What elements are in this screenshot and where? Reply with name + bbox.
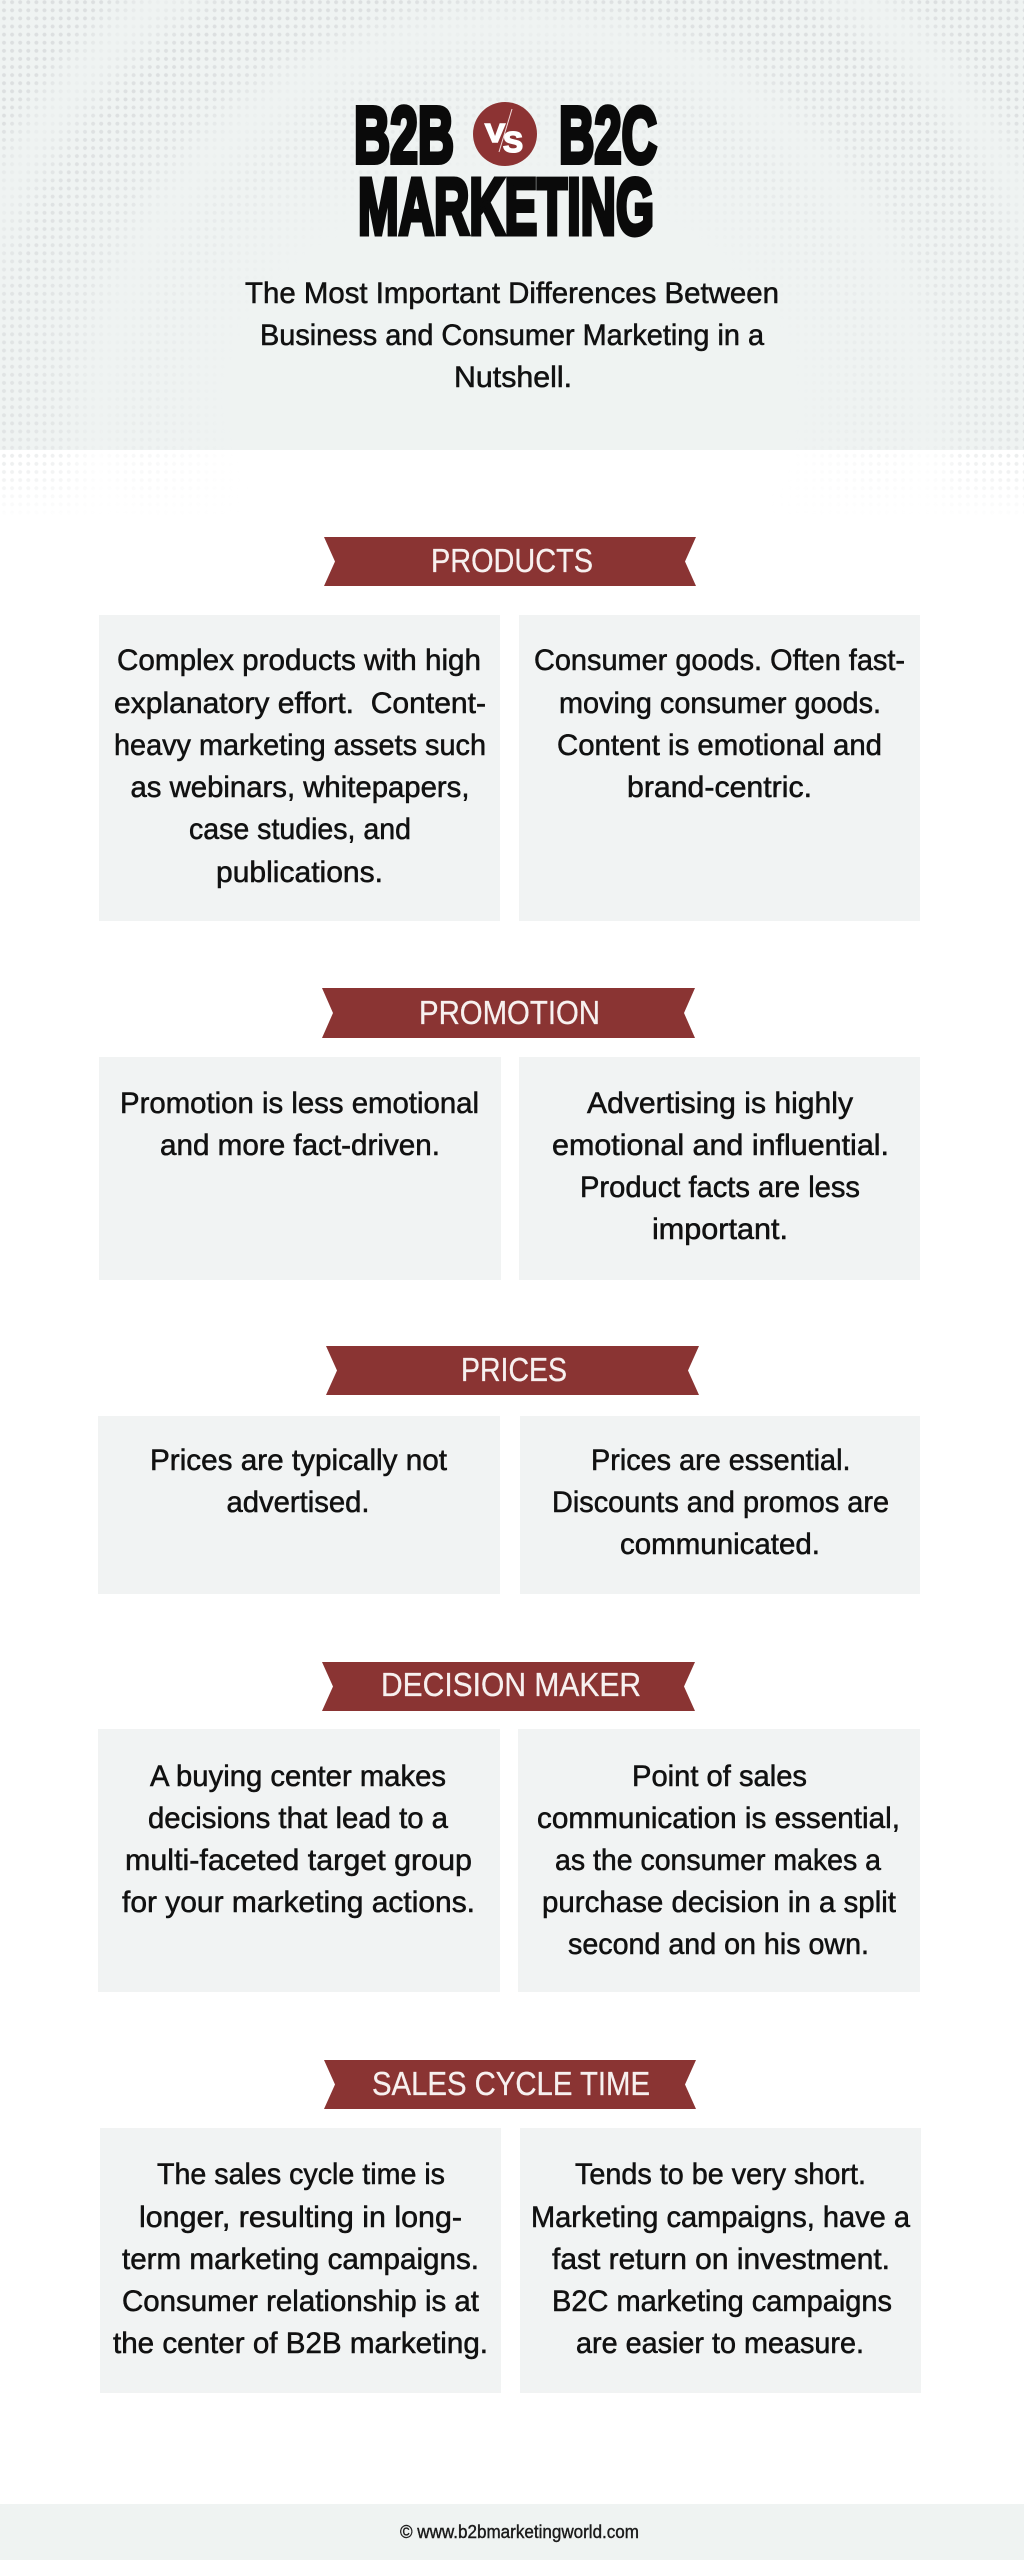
panel: B2C decision maker: purchase decision in a split: [542, 1886, 897, 1919]
subtitle: Business and Consumer Marketing in a: [260, 319, 764, 352]
subtitle: Nutshell.: [454, 361, 572, 394]
panel: B2C products: moving consumer goods.: [559, 687, 881, 720]
icon: VS badge: S: [503, 127, 523, 159]
banner: PRODUCTS: [324, 537, 696, 586]
panel: B2B sales cycle: [100, 2128, 501, 2393]
panel: B2C promotion: Product facts are less: [580, 1171, 860, 1204]
icon: VS badge: [473, 102, 537, 166]
banner: DECISION MAKER: [322, 1662, 695, 1711]
panel: B2C prices: [520, 1416, 920, 1594]
panel: B2B products: heavy marketing assets such: [114, 729, 486, 762]
panel: B2B products: as webinars, whitepapers,: [130, 771, 470, 804]
panel: B2C decision maker: communication is essential,: [537, 1802, 900, 1835]
banner: PROMOTION: [322, 988, 695, 1038]
panel: B2B decision maker: [98, 1729, 500, 1992]
footer: © www.b2bmarketingworld.com: [400, 2522, 639, 2542]
panel: B2C promotion: emotional and influential.: [552, 1129, 889, 1162]
panel: B2B prices: [98, 1416, 500, 1594]
panel: B2B decision maker: A buying center makes: [150, 1760, 446, 1793]
banner: PRICES: [326, 1346, 699, 1395]
banner: DECISION MAKER: DECISION MAKER: [381, 1666, 641, 1703]
panel: B2C sales cycle: Tends to be very short.: [575, 2158, 866, 2191]
title word: B2B: B2B: [354, 90, 454, 180]
panel: B2C promotion: important.: [652, 1213, 788, 1246]
panel: B2C prices: Prices are essential.: [591, 1444, 850, 1477]
panel: B2B prices: Prices are typically not: [150, 1444, 448, 1477]
panel: B2C products: brand-centric.: [627, 771, 812, 804]
subtitle: [245, 277, 779, 394]
footer: [0, 2504, 1024, 2560]
banner: PROMOTION: PROMOTION: [419, 994, 600, 1031]
panel: B2C sales cycle: B2C marketing campaigns: [552, 2285, 892, 2318]
panel: B2C sales cycle: are easier to measure.: [576, 2327, 864, 2360]
panel: B2B decision maker: multi-faceted target group: [125, 1844, 472, 1877]
panel: B2B promotion: Promotion is less emotional: [120, 1087, 479, 1120]
panel: B2B products: case studies, and: [189, 813, 411, 846]
panel: B2B prices: advertised.: [226, 1486, 370, 1519]
section: products: [99, 537, 920, 921]
panel: B2B sales cycle: term marketing campaigns.: [122, 2243, 479, 2276]
panel: B2C decision maker: as the consumer makes a: [555, 1844, 881, 1877]
panel: B2C products: Content is emotional and: [557, 729, 882, 762]
panel: B2B sales cycle: the center of B2B marketing.: [113, 2327, 488, 2360]
title word: MARKETING: MARKETING: [358, 162, 654, 251]
panel: B2B sales cycle: Consumer relationship is at: [122, 2285, 480, 2318]
icon: VS badge: V: [485, 118, 506, 148]
banner: PRICES: PRICES: [461, 1351, 567, 1388]
panel: B2C promotion: Advertising is highly: [587, 1087, 853, 1120]
panel: B2C prices: communicated.: [620, 1528, 820, 1561]
banner: SALES CYCLE TIME: [324, 2060, 696, 2109]
panel: B2B products: Complex products with high: [117, 644, 481, 677]
section: promotion: [99, 988, 920, 1280]
panel: B2C products: Consumer goods. Often fast-: [534, 644, 905, 677]
section: decision maker: [98, 1662, 920, 1992]
section: prices: [98, 1346, 920, 1594]
halftone dot pattern: [0, 0, 1024, 515]
header band: [0, 0, 1024, 450]
title: [354, 90, 657, 251]
panel: B2C sales cycle: Marketing campaigns, have a: [531, 2201, 910, 2234]
title word: B2C: B2C: [559, 90, 657, 180]
panel: B2C sales cycle: [520, 2128, 921, 2393]
banner: SALES CYCLE TIME: SALES CYCLE TIME: [372, 2065, 650, 2102]
panel: B2B sales cycle: The sales cycle time is: [157, 2158, 445, 2191]
section: sales cycle time: [100, 2060, 921, 2393]
panel: B2C sales cycle: fast return on investment.: [552, 2243, 890, 2276]
panel: B2B products: publications.: [216, 856, 383, 889]
panel: B2C decision maker: [518, 1729, 920, 1992]
panel: B2B decision maker: decisions that lead to a: [148, 1802, 448, 1835]
panel: B2B products: [99, 615, 500, 921]
panel: B2C decision maker: second and on his own.: [568, 1928, 869, 1961]
panel: B2B promotion: [99, 1057, 501, 1280]
banner: PRODUCTS: PRODUCTS: [431, 542, 593, 579]
panel: B2B decision maker: for your marketing actions.: [122, 1886, 475, 1919]
panel: B2C promotion: [519, 1057, 920, 1280]
panel: B2B sales cycle: longer, resulting in long-: [139, 2201, 462, 2234]
subtitle: The Most Important Differences Between: [245, 277, 779, 310]
panel: B2C prices: Discounts and promos are: [552, 1486, 889, 1519]
panel: B2B promotion: and more fact-driven.: [160, 1129, 440, 1162]
panel: B2C decision maker: Point of sales: [632, 1760, 807, 1793]
panel: B2B products: explanatory effort. Content-: [114, 687, 486, 720]
panel: B2C products: [519, 615, 920, 921]
